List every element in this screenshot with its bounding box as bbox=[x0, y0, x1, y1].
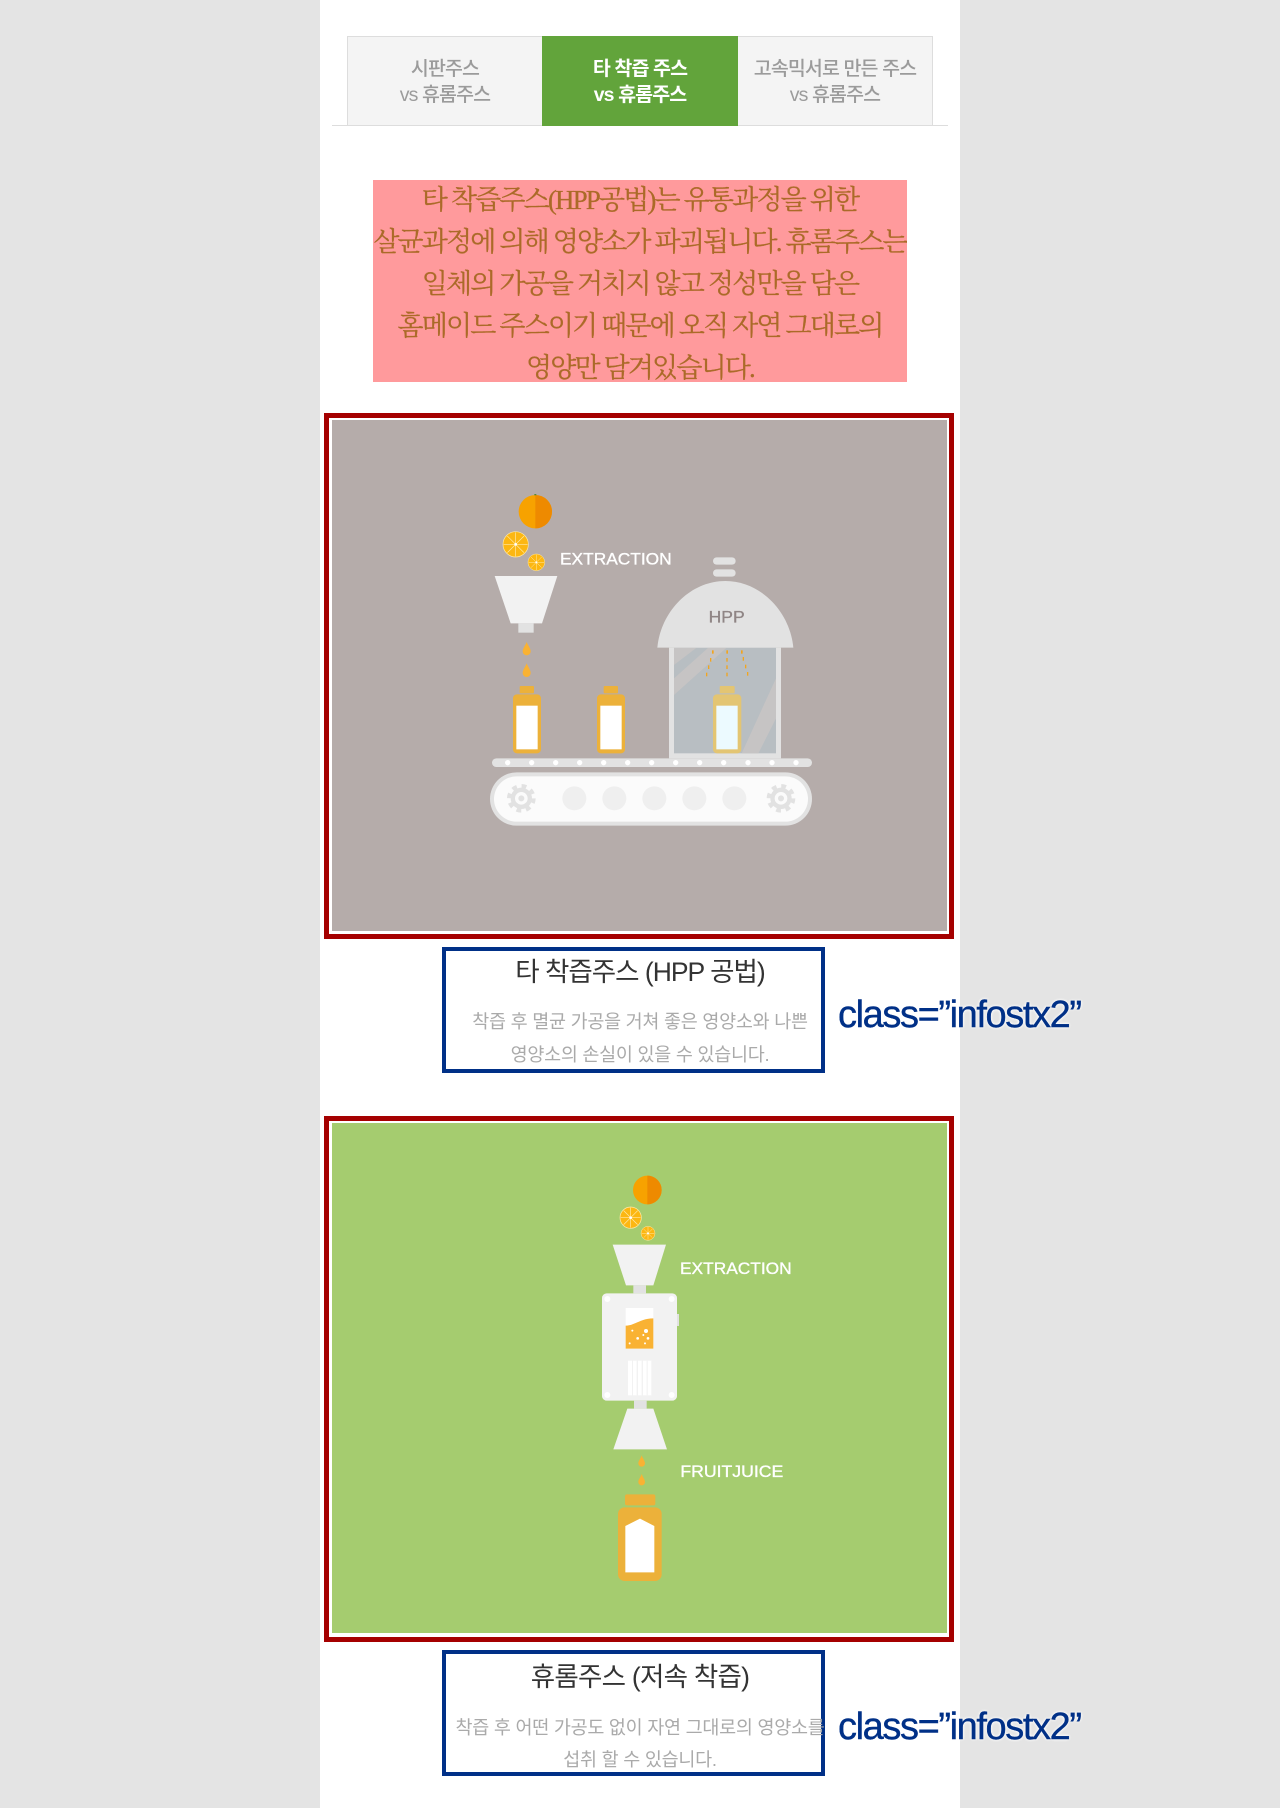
panel: HPP process illustration bbox=[324, 413, 954, 939]
HPP chamber: HPP bbox=[709, 608, 745, 627]
caption heading: 휴롬주스 (저속 착즙) bbox=[531, 1662, 749, 1692]
icon: funnel bbox=[495, 576, 557, 633]
icon: input funnel bbox=[613, 1245, 666, 1293]
label: extraction: EXTRACTION bbox=[560, 550, 672, 569]
panel background bbox=[332, 420, 947, 931]
tab: high speed blender juice: 고속믹서로 만든 주스 bbox=[754, 58, 916, 80]
label: fruit juice: FRUITJUICE bbox=[680, 1462, 783, 1481]
caption heading: 타 착즙주스 (HPP 공법) bbox=[515, 957, 765, 987]
caption body: 착즙 후 어떤 가공도 없이 자연 그대로의 영양소를 bbox=[455, 1717, 825, 1738]
icon: output funnel bbox=[613, 1401, 667, 1449]
tab: other juice (active): vs 휴롬주스 bbox=[594, 84, 686, 106]
tab bar bbox=[332, 36, 948, 126]
tab: other juice (active): 타 착즙 주스 bbox=[593, 58, 687, 80]
intro text block bbox=[373, 180, 907, 382]
illustration: HPP production line bbox=[490, 494, 812, 826]
icon: juice drops bbox=[523, 642, 531, 677]
class annotation two: class=”infostx2” bbox=[838, 1706, 1081, 1748]
tab baseline bbox=[332, 125, 948, 126]
conveyor rail bbox=[492, 758, 812, 767]
icon: orange slice large bbox=[503, 532, 528, 557]
caption body: 영양소의 손실이 있을 수 있습니다. bbox=[511, 1044, 769, 1065]
tab: high speed blender juice bbox=[738, 36, 933, 126]
label: extraction: EXTRACTION bbox=[680, 1259, 792, 1278]
icon: bottle one bbox=[513, 686, 541, 753]
intro text block: 타 착즙주스(HPP공법)는 유통과정을 위한 bbox=[422, 185, 858, 215]
tab: store-bought juice bbox=[347, 36, 542, 126]
caption body bbox=[455, 1717, 825, 1770]
caption box: slow juicer juice bbox=[442, 1650, 825, 1776]
icon: juice drops bbox=[638, 1455, 645, 1485]
conveyor body bbox=[490, 772, 812, 826]
caption body: 착즙 후 멸균 가공을 거쳐 좋은 영양소와 나쁜 bbox=[472, 1011, 808, 1032]
icon: orange slice small bbox=[528, 554, 545, 571]
icon: juice bottle bbox=[618, 1494, 662, 1581]
intro text block: 살균과정에 의해 영양소가 파괴됩니다. 휴롬주스는 bbox=[373, 227, 907, 257]
icon: whole orange bbox=[633, 1176, 662, 1204]
caption box: HPP juice bbox=[442, 947, 825, 1073]
icon: orange slice large bbox=[620, 1207, 641, 1228]
tab: store-bought juice: vs 휴롬주스 bbox=[400, 84, 490, 106]
icon: whole orange bbox=[519, 494, 552, 528]
icon: juicer machine bbox=[602, 1293, 679, 1401]
tab: other juice (active) bbox=[542, 36, 738, 126]
tab: high speed blender juice: vs 휴롬주스 bbox=[790, 84, 880, 106]
caption body bbox=[472, 1011, 808, 1065]
HPP chamber bbox=[657, 557, 793, 758]
icon: bottle two bbox=[597, 686, 625, 753]
class annotation one: class=”infostx2” bbox=[838, 994, 1081, 1036]
caption body: 섭취 할 수 있습니다. bbox=[563, 1749, 717, 1770]
panel background bbox=[332, 1123, 947, 1633]
icon: orange slice small bbox=[641, 1226, 655, 1240]
page column bbox=[320, 0, 960, 1808]
tab: store-bought juice: 시판주스 bbox=[411, 58, 479, 80]
intro text block: 일체의 가공을 거치지 않고 정성만을 담은 bbox=[422, 269, 858, 299]
panel: slow juicer illustration bbox=[324, 1116, 954, 1642]
intro text block: 홈메이드 주스이기 때문에 오직 자연 그대로의 bbox=[398, 311, 882, 341]
illustration: slow juicer bbox=[602, 1176, 792, 1581]
